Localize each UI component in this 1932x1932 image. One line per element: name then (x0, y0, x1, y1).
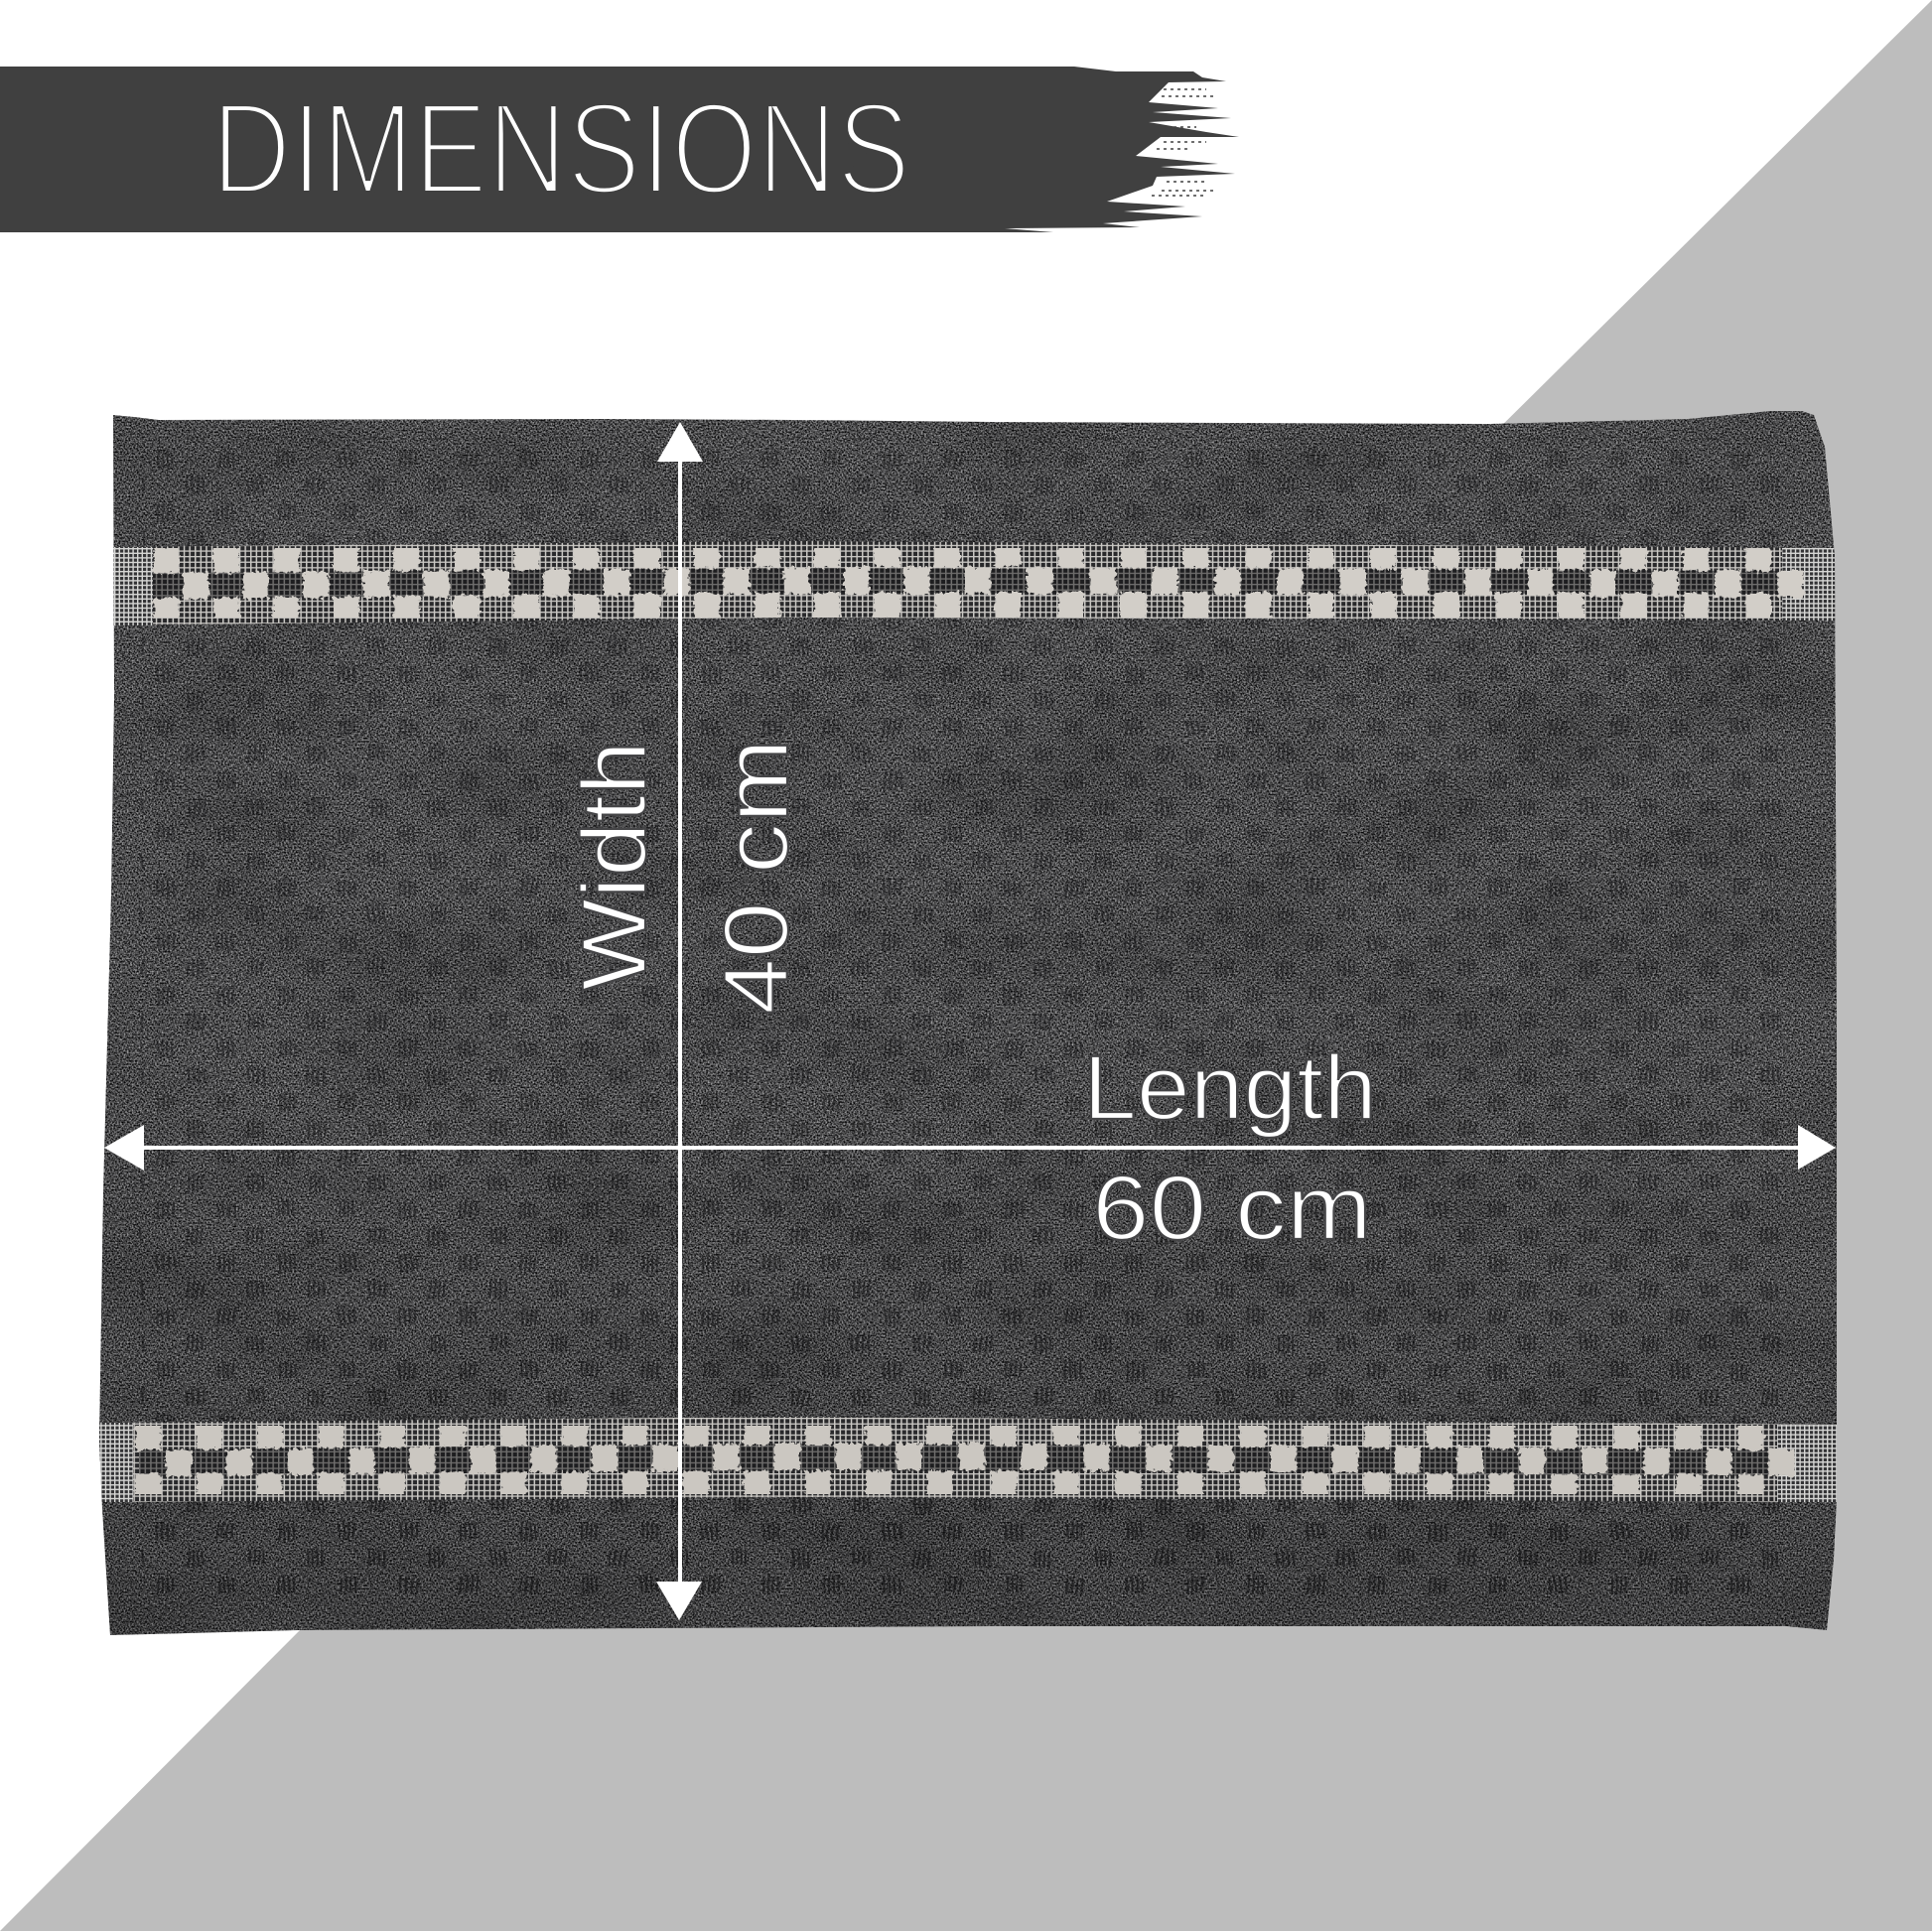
top band right selvedge (1782, 548, 1835, 621)
top band left selvedge (113, 547, 153, 625)
bottom band middle row darkening (139, 1444, 1777, 1476)
title: DIMENSIONS (211, 75, 910, 221)
length arrow head left (104, 1125, 144, 1171)
towel waffle weave marks (139, 437, 1787, 1603)
bottom checkered band (94, 1417, 1847, 1502)
bottom band left selvedge (99, 1423, 133, 1502)
width dimension arrow (656, 422, 703, 1620)
towel low-frequency mottling (89, 402, 1852, 1643)
width value: 40 cm (706, 739, 807, 1015)
top band middle row darkening (149, 568, 1777, 599)
length dimension arrow (104, 1125, 1836, 1171)
brush bristle specks (1152, 89, 1216, 196)
towel photo (89, 402, 1852, 1643)
towel shading (99, 1263, 1837, 1635)
top band open grid (99, 541, 1847, 625)
title banner with torn brush edge (0, 67, 1239, 232)
length arrow head right (1798, 1125, 1836, 1170)
length value: 60 cm (1092, 1158, 1372, 1259)
banner body (0, 67, 1239, 232)
bottom band open grid (94, 1417, 1847, 1502)
towel base fabric (89, 402, 1852, 1643)
length label: Length (1083, 1037, 1377, 1139)
length arrow shaft (139, 1146, 1802, 1150)
top checkered band (99, 541, 1847, 625)
background: grey wedge lower (0, 1620, 1932, 1931)
width label: Width (564, 741, 665, 991)
width arrow head top (657, 422, 703, 462)
top band light squares (153, 554, 1805, 612)
bottom band light squares (135, 1432, 1797, 1488)
background: grey wedge upper right (1390, 0, 1932, 1688)
bottom band right selvedge (1777, 1425, 1837, 1502)
width arrow shaft (678, 457, 682, 1588)
width arrow head bottom (656, 1582, 702, 1620)
